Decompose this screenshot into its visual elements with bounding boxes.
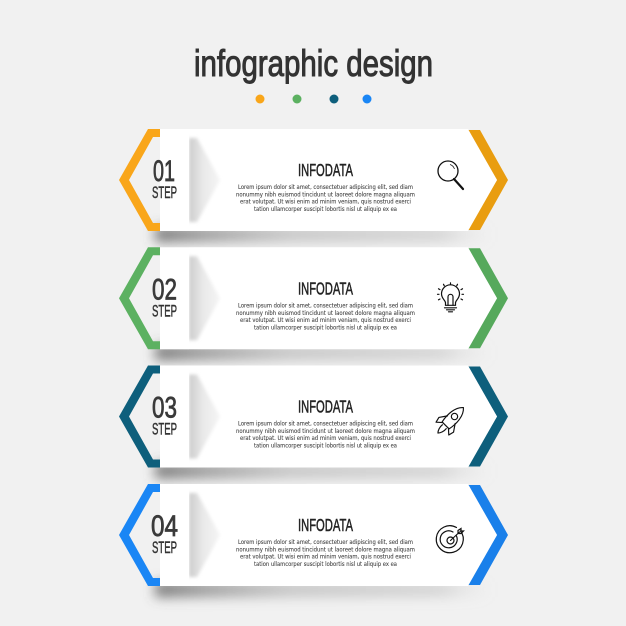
right chevron [468,248,508,348]
body text: erat volutpat. Ut wisi enim ad minim veniam, quis nostrud exerci [240,554,411,560]
body text [236,422,415,450]
body text: nonummy nibh euismod tincidunt ut laoreet dolore magna aliquam [236,429,415,435]
inner arrow shadow [189,256,220,340]
icon: magnifier [438,161,463,189]
left chevron [119,129,160,231]
heading: INFODATA [298,396,353,416]
right chevron [468,130,508,230]
body text: tation ullamcorper suscipit lobortis nisl ut aliquip ex ea [254,207,397,213]
body text: tation ullamcorper suscipit lobortis nisl ut aliquip ex ea [254,444,397,450]
step number: 01 [153,155,175,188]
step label: STEP [152,302,177,320]
body text: erat volutpat. Ut wisi enim ad minim veniam, quis nostrud exerci [240,436,411,442]
body text: nonummy nibh euismod tincidunt ut laoreet dolore magna aliquam [236,192,415,198]
body text: Lorem ipsum dolor sit amet, consectetuer adipiscing elit, sed diam [238,303,413,309]
panel: step 1 [119,129,508,242]
inner arrow shadow [189,493,220,577]
inner arrow shadow [189,374,220,458]
card shadow [155,582,490,597]
card shadow [155,464,490,478]
body text: tation ullamcorper suscipit lobortis nisl ut aliquip ex ea [254,325,397,331]
step label: STEP [152,539,177,557]
body text: erat volutpat. Ut wisi enim ad minim veniam, quis nostrud exerci [240,318,411,324]
heading: INFODATA [298,278,353,298]
step number: 02 [152,273,177,306]
icon: target [436,526,464,553]
title: infographic design [194,43,433,84]
step tab [160,366,189,468]
heading: INFODATA [298,515,353,535]
step label: STEP [152,420,177,438]
body text: Lorem ipsum dolor sit amet, consectetuer adipiscing elit, sed diam [238,540,413,546]
card shadow [155,227,490,242]
body text: tation ullamcorper suscipit lobortis nisl ut aliquip ex ea [254,562,397,568]
body text: nonummy nibh euismod tincidunt ut laoreet dolore magna aliquam [236,548,415,554]
card body [189,247,497,349]
card body [189,129,497,231]
panel: step 4 [119,484,508,597]
heading: INFODATA [298,160,353,180]
body text: Lorem ipsum dolor sit amet, consectetuer adipiscing elit, sed diam [238,185,413,191]
icon: light bulb [438,283,464,312]
right chevron [468,366,508,466]
colour dots [256,94,372,104]
body text: nonummy nibh euismod tincidunt ut laoreet dolore magna aliquam [236,311,415,317]
step number: 04 [151,510,178,543]
step label: STEP [152,184,177,202]
right chevron [468,485,508,585]
card body [189,484,497,586]
left chevron [119,484,160,586]
left chevron [119,366,160,468]
icon: rocket [431,400,471,440]
body text: erat volutpat. Ut wisi enim ad minim veniam, quis nostrud exerci [240,200,411,206]
card body [189,366,497,468]
panel: step 2 [119,247,508,360]
left chevron [119,247,160,349]
body text [236,185,415,213]
step tab [160,247,189,349]
panel: step 3 [119,366,508,478]
card shadow [155,345,490,360]
step tab [160,129,189,231]
step number: 03 [152,392,177,424]
body text: Lorem ipsum dolor sit amet, consectetuer adipiscing elit, sed diam [238,422,413,428]
body text [236,303,415,331]
inner arrow shadow [189,138,220,222]
step tab [160,484,189,586]
body text [236,540,415,568]
